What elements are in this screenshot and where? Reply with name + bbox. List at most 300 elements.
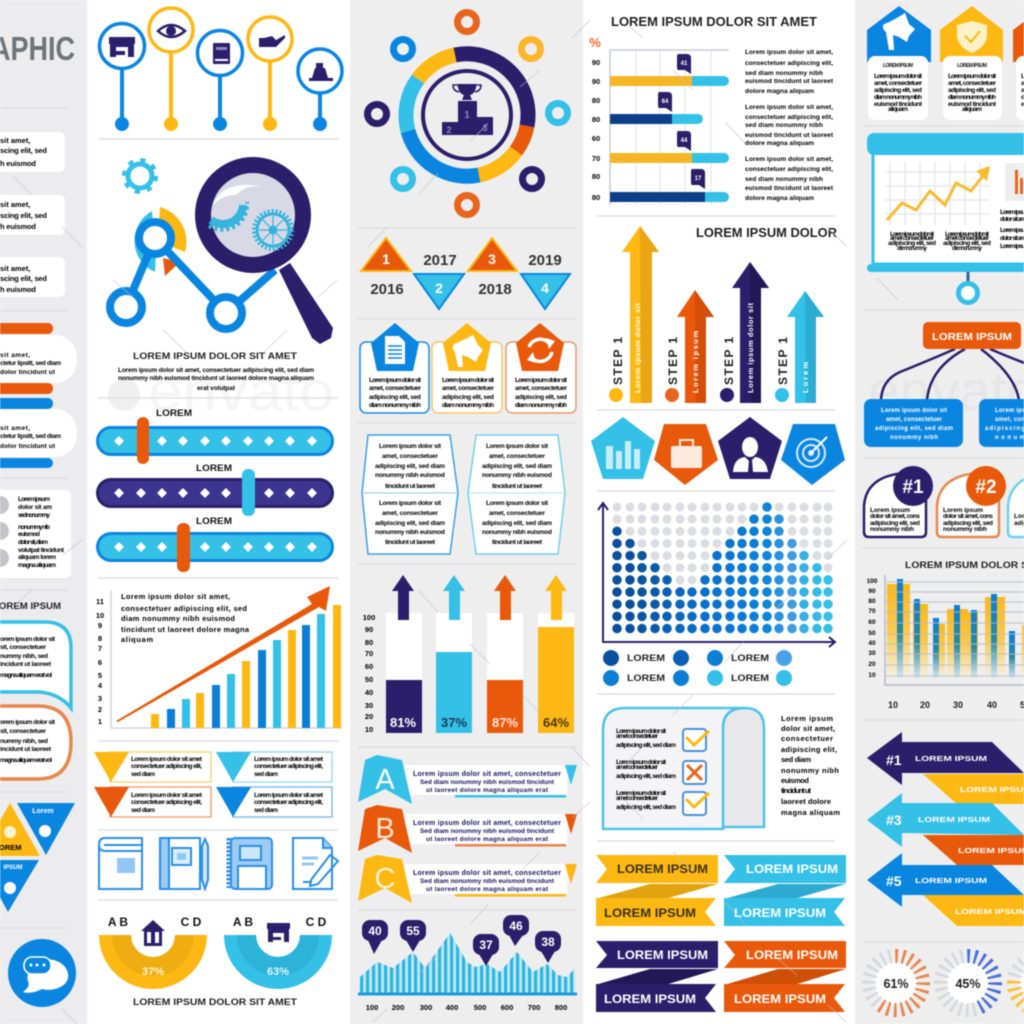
speech bubble orange: incidunt ut laoreet — [0, 746, 52, 753]
ribbon A: ut laoreet dolore magna aliquam erat — [426, 787, 549, 794]
text block: nonummy nibh euismod tincidunt ut laoreet dolore magna aliquam — [118, 375, 314, 382]
slider one: LOREM — [156, 408, 192, 418]
arrow step yellow: STEP 1 — [611, 337, 625, 385]
card: document: Lorem ipsum dolor sit — [369, 377, 422, 384]
icon: document with pen — [293, 838, 338, 889]
hex note left: nonummy nibh euismod — [375, 529, 445, 536]
checklist note: tincidunt ut — [781, 786, 812, 795]
card: megaphone: adipiscing elit, sed — [442, 394, 494, 401]
striped area chart: 500 — [474, 1003, 486, 1012]
board captions: Lorem ipsum dolor sit — [945, 231, 990, 238]
icon: target pentagon — [781, 424, 845, 485]
panel: column 4 — [589, 15, 846, 1012]
step arrows — [609, 226, 824, 403]
arrow step navy: STEP 1 — [722, 337, 736, 385]
banner orange: LOREM IPSUM — [746, 948, 838, 962]
text block: Lorem ipsum dolor sit amet, consectetuer adipiscing elit, sed diam — [118, 367, 314, 374]
striped area chart — [358, 915, 577, 1012]
speech bubble orange — [0, 706, 71, 779]
checklist scroll: adipiscing elit, sed diam — [616, 773, 676, 780]
column chart: 60 — [868, 619, 876, 626]
column chart: 30 — [868, 650, 876, 657]
striped area chart: 600 — [501, 1003, 513, 1012]
chart notes: euismod tincidunt ut laoreet — [745, 78, 834, 85]
card: megaphone: Lorem ipsum dolor sit — [442, 377, 495, 384]
arrow 1 navy: LOREM IPSUM — [915, 754, 987, 763]
white notes: h euismod — [0, 159, 36, 168]
striped area chart: 100 — [366, 1003, 378, 1012]
text block: erat volutpat — [197, 385, 236, 392]
icon: spiral notebook — [229, 838, 272, 889]
heading: LOREM IPSUM DOLOR SIT AMET — [133, 351, 298, 361]
card: refresh: diam nonummy nibh — [515, 402, 567, 409]
hex note left — [362, 435, 458, 554]
arrow 3 sky: LOREM IPSUM — [958, 846, 1024, 855]
value pins — [362, 915, 561, 966]
arrow column chart: 30 — [365, 701, 373, 710]
half donut yellow — [99, 915, 207, 989]
icon list box — [0, 490, 71, 578]
ribbon C: Sed diam nonummy nibh euismod tincidunt — [420, 878, 555, 885]
card: megaphone — [432, 323, 502, 413]
growth bar chart: 11 — [96, 597, 104, 606]
checklist note: sed diam — [781, 755, 811, 764]
board captions: diam nonummy — [897, 245, 927, 252]
card 1: Lorem ipsum — [870, 507, 910, 514]
striped area chart: 300 — [420, 1003, 432, 1012]
panel: column 5 right edge — [863, 6, 1024, 1011]
arrow 5 blue: LOREM IPSUM — [915, 876, 987, 885]
triangle note cards: consectetuer adipiscing elit, — [131, 763, 202, 770]
triangle note cards: consectetuer adipiscing elit, — [131, 799, 202, 806]
card 3 — [1008, 473, 1024, 537]
gauge 45 percent: 45% — [955, 977, 981, 991]
hex note right: nonummy nibh euismod — [482, 472, 552, 479]
zigzag banners — [595, 855, 846, 1012]
card: refresh: Lorem ipsum dolor sit — [515, 377, 568, 384]
gauge 45 percent — [940, 955, 996, 1011]
chart notes: dolore magna aliquam — [745, 195, 814, 202]
ribbon B — [358, 805, 577, 853]
white notes: sit amet, — [0, 200, 30, 209]
triangle cluster: IPSUM — [3, 865, 23, 871]
half donut yellow: 37% — [142, 966, 164, 978]
striped area chart: 700 — [528, 1003, 540, 1012]
banner yellow: LOREM IPSUM — [604, 906, 696, 920]
growth bar chart — [96, 586, 342, 728]
icon: hand — [259, 35, 285, 47]
white notes: sit amet, — [0, 136, 30, 145]
column chart: 10 — [888, 700, 898, 710]
trend arrow — [116, 586, 330, 722]
icon: house — [141, 920, 165, 946]
card blue: adipiscing elit, sed — [874, 87, 922, 94]
slider three — [98, 516, 332, 572]
arrow step sky: STEP 1 — [776, 337, 790, 385]
card yellow — [940, 6, 1003, 120]
chart notes: Lorem ipsum dolor sit amet, — [745, 104, 833, 111]
arrow step sky: Lorem — [801, 362, 810, 393]
magnifying glass — [203, 165, 333, 344]
checklist note: Lorem ipsum — [781, 714, 833, 723]
chart notes: sed diam nonummy nibh — [745, 122, 823, 129]
column chart: 20 — [920, 700, 930, 710]
icon: chart pentagon — [591, 417, 655, 479]
banner yellow: LOREM IPSUM — [617, 862, 708, 876]
icon list box: euismod — [18, 531, 40, 538]
card yellow: euismod tincidunt — [948, 101, 997, 108]
speech bubble sky: sit, consectetuer — [0, 644, 46, 651]
checklist scroll — [603, 708, 764, 829]
horizontal progress chart: 44 — [681, 138, 688, 144]
ribbon A: Lorem ipsum dolor sit amet, consectetuer — [413, 771, 561, 778]
panel: column 3 — [358, 12, 577, 1012]
striped area chart: 800 — [555, 1003, 567, 1012]
icon list box: nonummy nib — [18, 524, 50, 531]
white notes: sit amet, — [0, 264, 30, 273]
card: document — [360, 323, 429, 413]
hex note right: amet, consectetuer — [489, 510, 545, 517]
horizontal progress chart: 17 — [695, 176, 702, 182]
icon list box: dolor sit, diam — [18, 539, 48, 546]
checklist note: nonummy nibh — [781, 766, 839, 775]
arrow step orange — [665, 290, 714, 403]
icon list box: sed nonummy — [18, 512, 50, 519]
card blue: Lorem ipsum dolor sit — [874, 73, 923, 80]
triangle note cards: consectetuer adipiscing elit, — [254, 763, 323, 770]
arrow step orange: STEP 1 — [666, 337, 680, 385]
icon: trophy podium: 1 — [464, 110, 470, 121]
satellite rings — [368, 12, 568, 214]
horizontal progress chart: 80 — [592, 96, 600, 105]
column chart: 80 — [868, 598, 876, 605]
dot matrix chart — [598, 503, 835, 686]
panel: column 2 — [94, 8, 342, 1007]
arrow column chart: 80 — [365, 638, 373, 647]
horizontal progress chart: 41 — [681, 61, 688, 67]
icon list box: dolor sit am — [18, 504, 52, 511]
letter ribbons — [358, 755, 577, 903]
icon: briefcase pentagon — [654, 424, 718, 485]
arrow column chart: 70 — [365, 649, 373, 658]
chart notes — [745, 49, 834, 202]
ranked cards — [864, 466, 1024, 537]
speech bubble sky — [0, 622, 71, 708]
growth bar chart: 9 — [98, 621, 102, 630]
sliders — [98, 408, 332, 572]
arrow column chart: 20 — [365, 712, 373, 721]
column chart: 30 — [953, 700, 963, 710]
checklist scroll: Lorem ipsum dolor sit — [616, 728, 667, 735]
card 1: nonummy nibh — [870, 526, 914, 533]
horizontal progress chart: 90 — [592, 77, 600, 86]
icon: book — [213, 43, 230, 64]
board captions: amet consectetuer — [890, 235, 934, 242]
checklist scroll: amet consectetuer — [616, 733, 658, 740]
icon: person pentagon — [718, 417, 782, 479]
dot base — [617, 507, 828, 632]
board captions: diam nonummy — [952, 245, 982, 252]
chart notes: consectetuer adipiscing elit, — [745, 166, 833, 173]
triangle cluster — [0, 803, 75, 912]
banner sky: LOREM IPSUM — [746, 862, 838, 876]
card 1: adipiscing elit, sed — [870, 520, 920, 527]
speech bubble orange: magna aliquam erat vol — [0, 757, 52, 764]
icon list box: Lorem ipsum — [18, 496, 50, 503]
checklist note: euismod — [781, 776, 809, 785]
arrow 1 navy: #1 — [886, 752, 902, 768]
icon: store — [267, 923, 290, 942]
speech bubble sky: orem ipsum dolor sit — [0, 636, 56, 643]
chart notes: consectetuer adipiscing elit, — [745, 114, 833, 121]
arrow step yellow: Lorem ipsum dolor sit — [633, 302, 642, 393]
ribbon bubbles: sit amet, — [0, 352, 30, 359]
horizontal progress chart: 80 — [592, 172, 600, 181]
hex note left: amet, consectetuer — [382, 510, 438, 517]
half donut sky — [224, 915, 332, 989]
arrow 1 navy — [867, 732, 1024, 804]
ribbon C: Lorem ipsum dolor sit amet, consectetuer — [413, 870, 561, 877]
chart notes: sed diam nonummy nibh — [745, 70, 823, 77]
white notes: h euismod — [0, 222, 36, 231]
org tree: Lorem ipsum dolor sit — [881, 408, 947, 414]
striped area chart: 40 — [368, 924, 382, 938]
banner sky: LOREM IPSUM — [734, 906, 826, 920]
icon list box: volutpat tincidunt — [18, 547, 65, 554]
column chart — [867, 575, 1024, 710]
striped area chart: 55 — [406, 924, 420, 938]
house cards — [867, 6, 1024, 120]
ribbon A: A — [375, 764, 395, 796]
white notes — [0, 132, 65, 297]
arrow column chart: 90 — [365, 625, 373, 634]
card orange — [1013, 6, 1024, 120]
triangle cluster: Lorem — [32, 808, 54, 815]
half donut yellow: A B — [108, 915, 128, 929]
arrow column chart: 81% — [390, 715, 416, 730]
hex note right: Lorem ipsum dolor sit — [486, 500, 549, 507]
half donut sky: 63% — [267, 966, 289, 978]
legend: LOREM — [627, 653, 665, 663]
ribbon B: Lorem ipsum dolor sit amet, consectetuer — [413, 820, 561, 827]
arrow column chart: 37% — [441, 715, 467, 730]
hex note left: tincidunt ut laoreet — [385, 539, 436, 546]
checklist scroll: adipiscing elit, sed diam — [616, 742, 676, 749]
numbered arrows — [867, 732, 1024, 926]
hex note right: amet, consectetuer — [489, 453, 545, 460]
year triangles: 2018 — [478, 281, 512, 298]
half donut sky: C D — [306, 915, 327, 929]
horizontal progress chart: 64 — [662, 99, 669, 105]
checklist note: consectetuer — [781, 734, 833, 743]
ribbon bubbles: ctetur lipsitt, sed diam — [0, 433, 61, 440]
chart notes: dolore magna aliquam — [745, 140, 814, 147]
horizontal progress chart: 60 — [592, 134, 600, 143]
arrow column chart: 10 — [365, 725, 373, 734]
year triangles — [361, 238, 570, 309]
chart notes: euismod tincidunt ut laoreet — [745, 132, 834, 139]
watermark: envato — [148, 359, 334, 422]
card 2: Lorem ipsum — [943, 507, 983, 514]
speech bubble orange: nummy nibh, sed — [0, 738, 48, 745]
horizontal progress chart: % — [589, 35, 601, 50]
gauge 61 percent: 61% — [883, 977, 909, 991]
pentagon icons — [591, 417, 845, 485]
arrow column chart — [363, 575, 574, 734]
card 2: nonummy nibh — [943, 526, 987, 533]
slider three: LOREM — [196, 516, 232, 526]
board captions: Lorem ipsum dolor sit — [890, 231, 935, 238]
heading: LOREM IPSUM DOLOR SIT AMET — [133, 997, 298, 1007]
card: refresh: amet, consectetuer — [515, 385, 567, 392]
triangle note cards: sed diam — [131, 771, 155, 778]
ribbon A — [358, 755, 577, 804]
hex note right — [468, 435, 565, 554]
radial gauges — [868, 955, 1024, 1011]
slider one — [98, 408, 332, 464]
check boxes — [683, 729, 709, 815]
speech bubble orange: sit, consectetuer — [0, 728, 46, 735]
growth bar chart: 3 — [98, 694, 102, 703]
arrow step navy: Lorem ipsum dolor sit — [746, 302, 755, 393]
triangle note cards: Lorem ipsum dolor sit amet — [131, 792, 203, 799]
card 1: dolor sit amet, cons — [870, 513, 920, 520]
horizontal progress chart: 70 — [592, 154, 600, 163]
checklist note: adipiscing elit, — [781, 745, 837, 754]
board line chart — [885, 162, 990, 225]
checklist scroll: adipiscing elit, sed diam — [616, 804, 676, 811]
hex note left: adipiscing elit, sed diam — [375, 463, 445, 470]
pin timeline — [100, 8, 342, 131]
hex note right: Lorem ipsum dolor sit — [486, 443, 549, 450]
segmented ring — [406, 54, 528, 176]
hex note right: adipiscing elit, sed diam — [482, 520, 552, 527]
year triangles: 2016 — [370, 281, 404, 298]
ribbon B: Sed diam nonummy nibh euismod tincidunt — [420, 828, 555, 835]
ribbon bubbles: ctetur lipsitt, sed diam — [0, 360, 61, 367]
presentation board — [867, 133, 1024, 302]
striped area chart: 400 — [446, 1003, 458, 1012]
card: megaphone: amet, consectetuer — [442, 385, 494, 392]
arrow step yellow — [609, 226, 659, 403]
org tree: adipiscing — [985, 426, 1024, 432]
white notes: h euismod — [0, 285, 36, 294]
chart notes: dolore magna aliquam — [745, 88, 814, 95]
arrow 5 blue — [867, 853, 1024, 926]
checklist note: laoreet dolore — [781, 797, 831, 806]
card: refresh — [506, 323, 576, 413]
banner navy: LOREM IPSUM — [604, 992, 696, 1006]
arrow column chart: 87% — [492, 715, 518, 730]
triangle note cards: sed diam — [254, 771, 278, 778]
arrow 1 navy: LOREM IPSUM — [960, 785, 1024, 794]
white notes: scing elit, sed — [0, 146, 47, 155]
card 1 — [864, 466, 933, 537]
arrow column chart: 64% — [543, 715, 569, 730]
ribbon bubbles — [0, 323, 77, 468]
card: megaphone: diam nonummy nibh — [442, 402, 494, 409]
dot series — [617, 507, 828, 632]
chart text: tincidunt ut laoreet dolore magna — [121, 625, 250, 634]
white notes: scing elit, sed — [0, 211, 47, 220]
org tree: adipiscing elit, sed diam — [875, 426, 953, 432]
card blue: euismod tincidunt — [874, 101, 923, 108]
hex note left: amet, consectetuer — [382, 453, 438, 460]
hex note left: tincidunt ut laoreet — [385, 483, 436, 490]
triangle note cards: Lorem ipsum dolor sit amet — [254, 792, 324, 799]
column chart: 20 — [868, 661, 876, 668]
gauge 61 percent — [868, 955, 924, 1011]
board mini chart — [1000, 163, 1024, 250]
chart notes: consectetuer adipiscing elit, — [745, 60, 833, 67]
triangle note cards: consectetuer adipiscing elit, — [254, 799, 323, 806]
chart text — [121, 592, 250, 644]
card 1: #1 — [902, 477, 924, 498]
year triangles: 4 — [541, 280, 549, 296]
hex note left: Lorem ipsum dolor sit — [379, 500, 442, 507]
ribbon C: ut laoreet dolore magna aliquam erat — [426, 886, 549, 893]
chart notes: Lorem ipsum dolor sit amet, — [745, 49, 833, 56]
card 2: dolor sit amet, cons — [943, 513, 993, 520]
triangle note cards: sed diam — [254, 807, 278, 814]
ribbon A: Sed diam nonummy nibh euismod tincidunt — [420, 779, 555, 786]
icon: trophy podium: 2 — [446, 125, 452, 135]
text block — [118, 367, 314, 392]
growth bar chart: 7 — [98, 644, 102, 653]
ribbon B: ut laoreet dolore magna aliquam erat — [426, 836, 549, 843]
icon: notebook — [160, 838, 208, 889]
hex note right: adipiscing elit, sed diam — [482, 463, 552, 470]
growth bar chart: 8 — [98, 634, 102, 643]
card 2: #2 — [975, 477, 997, 498]
icon: printer — [309, 63, 333, 81]
horizontal progress chart: 80 — [592, 193, 600, 202]
horizontal progress chart — [589, 35, 729, 205]
banner navy: LOREM IPSUM — [617, 948, 708, 962]
column chart: 100 — [867, 578, 878, 585]
horizontal progress chart: 90 — [592, 58, 600, 67]
card blue: amet, consectetuer — [874, 80, 922, 87]
triangle note cards: sed diam — [131, 807, 155, 814]
slider two: LOREM — [196, 463, 232, 473]
card blue: diam nonummy nibh — [874, 94, 922, 101]
card: document: adipiscing elit, sed — [369, 394, 421, 401]
arrow column chart: 40 — [365, 688, 373, 697]
card 2 — [937, 466, 1006, 537]
arrow 5 blue: LOREM IPSUM — [955, 907, 1024, 916]
card blue — [867, 6, 931, 120]
card yellow: aliquam — [962, 106, 982, 113]
board captions — [888, 231, 991, 252]
white notes: scing elit, sed — [0, 274, 47, 283]
chart text: consectetuer adipiscing elit, sed — [121, 604, 247, 613]
board captions: adipiscing elit, sed — [888, 240, 936, 247]
hex note right: tincidunt ut laoreet — [492, 539, 543, 546]
growth bar chart: 4 — [98, 681, 103, 690]
card blue: aliquam — [888, 106, 908, 113]
card: document: amet, consectetuer — [369, 385, 421, 392]
board captions: adipiscing elit, sed — [943, 240, 991, 247]
growth bar chart: 1 — [98, 717, 102, 726]
card yellow: adipiscing elit, sed — [948, 87, 996, 94]
panel: column 1 left edge — [0, 30, 77, 1007]
donut — [134, 207, 186, 276]
column chart: 50 — [868, 630, 876, 637]
icon: trophy podium: 3 — [482, 123, 488, 133]
chart notes: Lorem ipsum dolor sit amet, — [745, 156, 833, 163]
speech bubble sky: nummy nibh, sed — [0, 653, 48, 660]
column chart: 40 — [987, 700, 997, 710]
